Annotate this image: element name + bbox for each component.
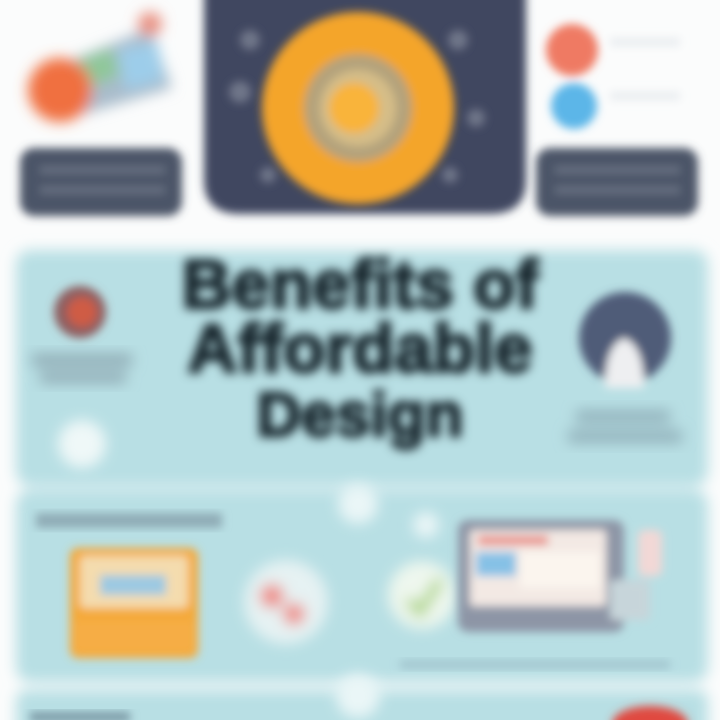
title: Affordable [188,310,532,387]
title [177,246,547,458]
heading: lower left label [36,513,222,528]
panel: top right list [546,24,680,129]
title: Benefits of [182,246,538,323]
icon: right avatar [579,292,671,388]
text block: left benefit [32,354,132,383]
panel: top left dark card [20,148,182,216]
panel: top centre dark phone [204,0,526,214]
text block: right benefit [568,410,682,443]
icon: left white circle [58,420,106,468]
text block: lower caption [400,660,670,669]
text: bottom left label [30,712,130,720]
icon: left red badge [54,286,106,338]
panel: light blue benefits background [16,250,708,720]
icon: browser monitor [458,520,662,632]
icon: green check circle [388,561,456,629]
title: Design [257,381,463,450]
icon: bottom right red badge [612,706,688,720]
icon: orange gear circle [262,12,454,204]
icon: percent circle [244,560,328,644]
icon: orange laptop [70,548,198,658]
panel: top left chart [28,12,172,122]
panel: top right dark card [536,148,698,216]
decorative soft dots [336,484,439,718]
icon: centre connection nodes [229,30,485,183]
